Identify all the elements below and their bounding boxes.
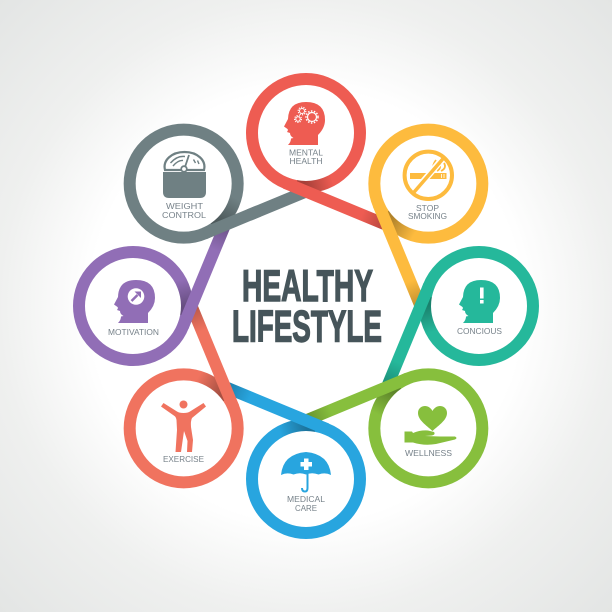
- icon: person with raised arms: [161, 400, 206, 452]
- label: stop smoking: SMOKING: [408, 211, 447, 221]
- label: mental health: MENTAL: [289, 148, 323, 158]
- icon: heart in hand: [404, 406, 456, 445]
- ribbon: weight control: [107, 107, 273, 273]
- label: exercise: EXERCISE: [163, 454, 204, 464]
- label: stop smoking: STOP: [416, 203, 439, 213]
- ribbon: wellness: [301, 324, 505, 527]
- ribbon end: weight control tail under mental health: [249, 171, 311, 233]
- label: stop smoking: [408, 203, 447, 221]
- icon: head with arrow: [114, 280, 155, 323]
- icon: weighing scale: [163, 152, 206, 198]
- ribbon: concious: [385, 252, 533, 392]
- label: weight control: [162, 201, 206, 220]
- title: LIFESTYLE: [232, 302, 382, 351]
- icon: head with exclamation: [459, 280, 500, 323]
- ribbon: mental health: [252, 79, 392, 227]
- label: concious: CONCIOUS: [457, 326, 502, 336]
- label: wellness: WELLNESS: [405, 448, 452, 458]
- icon: no smoking: [405, 152, 452, 199]
- ribbon: stop smoking: [324, 107, 527, 311]
- label: weight control: WEIGHT: [166, 201, 203, 211]
- icon: umbrella: [281, 452, 331, 492]
- title: [232, 262, 382, 351]
- label: mental health: [289, 148, 323, 166]
- label: medical care: [287, 494, 325, 513]
- icon: head with gears: [284, 102, 325, 145]
- label: mental health: HEALTH: [290, 156, 322, 166]
- label: motivation: MOTIVATION: [108, 327, 159, 337]
- label: weight control: CONTROL: [162, 210, 206, 220]
- ribbon: exercise: [85, 301, 288, 505]
- label: medical care: CARE: [295, 503, 317, 513]
- ribbon: motivation: [79, 220, 227, 360]
- title: HEALTHY: [242, 262, 373, 311]
- label: medical care: MEDICAL: [287, 494, 325, 504]
- ribbon: medical care: [220, 385, 360, 533]
